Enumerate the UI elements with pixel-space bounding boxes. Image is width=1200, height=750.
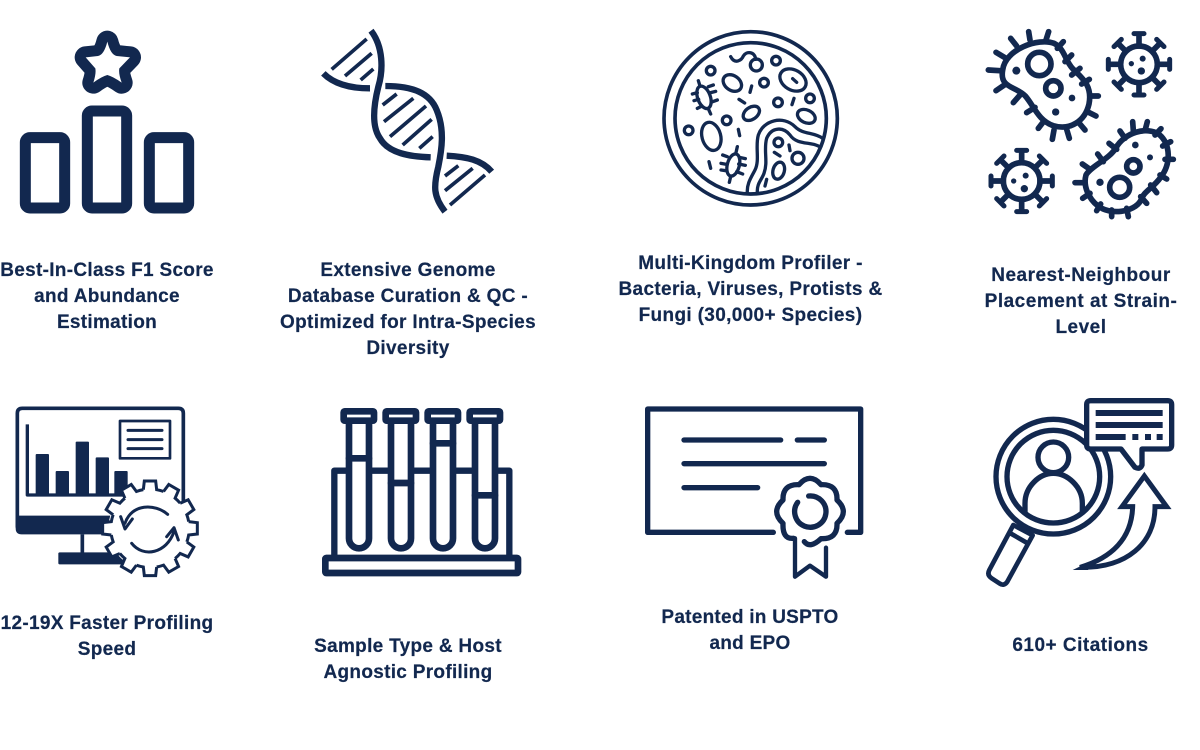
heading: faster profiling: Speed [78,639,136,660]
heading: genome database: Optimized for Intra-Species [280,312,536,333]
icon: DNA helix [321,28,494,214]
virus: upper right [1108,34,1170,95]
icon: podium with star [20,30,194,214]
icon: bacteria and viruses [986,28,1176,220]
heading: nearest-neighbour: Level [1055,317,1107,338]
heading: best-in-class: Best-In-Class F1 Score [0,260,214,281]
heading: best-in-class [0,260,214,333]
icon: petri dish [662,30,840,207]
heading: patented: Patented in USPTO [661,607,839,628]
icon: magnifier, person, speech bubble, arrow [986,398,1174,587]
heading: sample type: Agnostic Profiling [323,662,493,683]
bacterium: large upper [988,32,1098,139]
heading: nearest-neighbour [985,265,1177,338]
heading: faster profiling [1,613,213,660]
heading: genome database: Database Curation & QC - [288,286,528,307]
heading: genome database: Extensive Genome [320,260,496,281]
heading: patented: and EPO [709,633,790,654]
heading: multi-kingdom: Fungi (30,000+ Species) [639,305,862,326]
icon: test tubes in rack [322,408,522,576]
heading: multi-kingdom [618,253,883,326]
heading: best-in-class: and Abundance [34,286,180,307]
bacterium: lower right [1075,122,1173,217]
heading: best-in-class: Estimation [57,312,157,333]
heading: multi-kingdom: Multi-Kingdom Profiler - [638,253,863,274]
icon: monitor with gear [16,406,199,578]
virus: lower left [991,150,1052,212]
heading: faster profiling: 12-19X Faster Profiling [1,613,213,634]
heading: genome database [280,260,536,359]
heading: nearest-neighbour: Nearest-Neighbour [991,265,1171,286]
heading: citations: 610+ Citations [1012,635,1149,656]
heading: genome database: Diversity [366,338,450,359]
heading: multi-kingdom: Bacteria, Viruses, Protists & [618,279,883,300]
icon: patent certificate [645,406,864,579]
heading: sample type [314,636,502,683]
gear with refresh arrows [102,481,198,576]
heading: sample type: Sample Type & Host [314,636,502,657]
heading: nearest-neighbour: Placement at Strain- [985,291,1177,312]
heading: patented [661,607,839,654]
